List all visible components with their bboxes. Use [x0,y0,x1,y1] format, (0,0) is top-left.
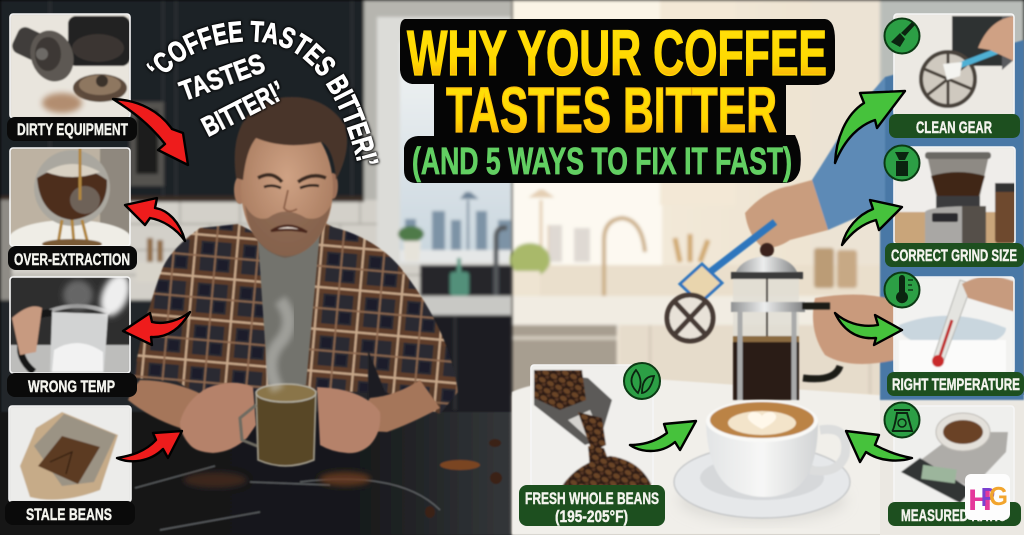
t-shirt [258,232,320,385]
icon: scale badge [884,402,920,438]
press lid [734,256,799,278]
photo [9,406,131,502]
title line 1: WHY YOUR COFFEE [407,17,827,89]
icon: thermometer badge [884,272,920,308]
photo [894,147,1015,244]
arrow: correct grind [842,200,902,245]
press glass [733,278,799,400]
table: white marble countertop [512,378,890,535]
arrow: right temperature [835,313,902,345]
arrow: wrong temp [123,312,190,345]
illustration: latte cup on saucer [674,400,850,522]
curved speech text: TASTES [175,47,269,107]
panel: clean gear [889,14,1020,138]
panel: fresh whole beans [519,365,665,526]
background: dark kitchen (left half) [0,0,512,535]
table: dark marble countertop [0,412,512,535]
panel: over-extraction [8,148,137,270]
panel: wrong temp [7,270,137,397]
photo [894,406,1014,503]
arrow: over-extraction [125,198,185,241]
arrow: clean gear [835,91,905,163]
forearm right [350,380,440,432]
forearm and hand holding brush [745,180,828,248]
curved speech text: BITTER!’ [197,75,289,142]
logo: HPG [965,474,1010,520]
brush [710,222,775,272]
nose [284,190,297,211]
photo [894,276,1016,373]
subtitle: (AND 5 WAYS TO FIX IT FAST) [412,141,792,183]
press bands [731,302,805,312]
steam [271,300,289,390]
panel: measured ratio [888,406,1021,526]
mug [240,384,316,466]
panel: stale beans [5,406,135,525]
illustration: frustrated man with mug [128,97,458,466]
title [400,17,835,183]
icon: leaf badge [624,363,660,399]
arrow: measured ratio [846,431,912,462]
label: FRESH WHOLE BEANS [525,489,659,508]
logo: HPG: P [981,482,995,512]
hands [180,383,256,453]
press handle [802,306,840,379]
arrow: fresh beans [630,421,696,451]
arrow: stale beans [117,431,182,461]
shirt [133,215,458,414]
photo [531,365,653,486]
panel: right temperature [887,276,1024,396]
arrow: dirty equipment to man [113,99,188,165]
label: WRONG TEMP [28,377,115,396]
curved speech text: ‘COFFEE TASTES BITTER!’ [145,19,381,166]
mouth [271,226,307,232]
label: OVER-EXTRACTION [14,250,130,269]
photo [10,148,130,246]
hair [235,97,347,180]
beard [245,205,331,258]
label: DIRTY EQUIPMENT [17,120,128,139]
label: STALE BEANS [26,505,112,524]
sleeve [812,77,885,230]
label [519,485,665,526]
head [234,97,347,258]
illustration: man in blue shirt [745,40,1024,400]
logo: HPG: H [968,484,992,517]
background: bright kitchen (right half) [510,0,1024,535]
lower hand on press [813,294,895,364]
icon: grinder jar badge [884,146,920,180]
neck [255,215,318,248]
title backing [400,19,835,183]
brow and eyes [258,175,326,182]
panel: dirty equipment [7,14,137,141]
photo [10,278,130,372]
title line 2: TASTES BITTER [446,74,777,146]
photo [894,14,1016,116]
strainer [667,295,713,341]
forearm left [128,380,230,440]
photo [10,14,130,118]
logo: HPG: G [989,481,1008,511]
torso [880,40,1024,400]
illustration: french press and brush [667,222,840,400]
panel: correct grind size [885,147,1024,267]
icon: brush badge [884,18,920,54]
label: (195-205°F) [555,507,628,526]
